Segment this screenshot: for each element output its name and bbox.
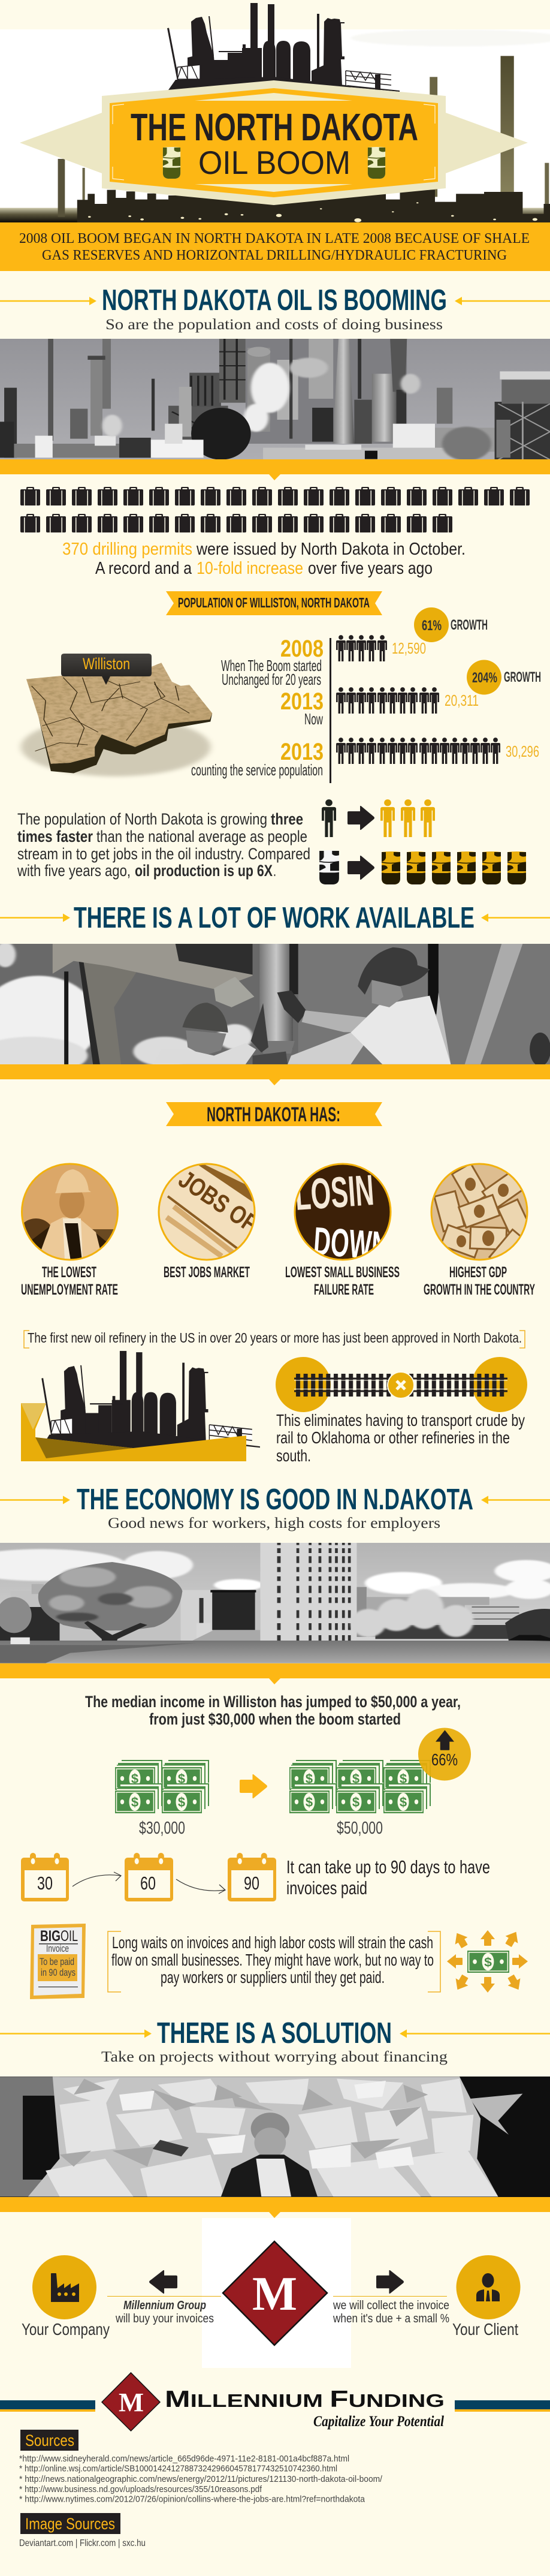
source links: * http://online.wsj.com/article/SB10001424127887324296604578177432510742360.html [19, 2463, 337, 2474]
panel: your client [452, 2255, 520, 2339]
source links: * http://news.nationalgeographic.com/news/energy/2012/11/pictures/121130-north-dakota-oil-boom/ [19, 2474, 383, 2484]
text block: population growth paragraph [17, 810, 310, 880]
subheading: So are the population and costs of doing business [105, 317, 443, 333]
badge: 61% growth: GROWTH [451, 617, 488, 633]
badge: 66% increase: 66% [431, 1750, 458, 1769]
icon: left barrel [163, 147, 180, 179]
row: 2013 with service population [191, 738, 539, 779]
band with pointer [0, 1064, 550, 1085]
photo: woman buried under paperwork [0, 2077, 550, 2197]
photo: oil workers [0, 942, 550, 1075]
source links [19, 2454, 383, 2504]
text block: eliminates rail transport [276, 1411, 525, 1465]
chart: income 30,000: $30,000 [139, 1819, 185, 1838]
band with pointer [0, 459, 550, 480]
flow: Millennium Group buys invoices: will buy your invoices [115, 2312, 214, 2325]
row: 2013 now [280, 687, 479, 728]
icon: big oil invoice: Invoice [46, 1943, 69, 1954]
row: 2013 now: 20,311 [445, 691, 479, 709]
image: worker in hard hat [18, 1163, 120, 1261]
icon: big oil invoice [30, 1924, 86, 1999]
image: closing down sign [293, 1163, 392, 1268]
text block: 90 days [286, 1856, 490, 1898]
chart: income 30,000 [115, 1760, 209, 1838]
icon: arrow to higher income [240, 1774, 267, 1798]
chart: population pictogram [191, 607, 541, 783]
text block: population growth paragraph: three [271, 810, 303, 828]
flow: Millennium Group buys invoices: Millennium Group [123, 2299, 206, 2312]
panel: hero header [0, 3, 550, 222]
label: UNEMPLOYMENT RATE [21, 1281, 118, 1298]
chart: income 50,000: $50,000 [337, 1819, 383, 1838]
panel: lowest small business failure rate [285, 1163, 400, 1298]
row: 2013 now: 2013 [280, 688, 324, 715]
label: Your Client [452, 2320, 518, 2339]
text: drilling permits: A record and a [95, 559, 192, 578]
image: closing down sign: DOWN [312, 1219, 390, 1268]
text: drilling permits: 10-fold increase [197, 559, 303, 578]
icon: big oil invoice: in 90 days [41, 1967, 75, 1978]
badge: 61% growth [414, 607, 488, 642]
banner: population of Williston [166, 591, 382, 615]
map: Williston region [21, 654, 212, 777]
row: 2008: 2008 [280, 636, 324, 662]
row: 2008: When The Boom started [221, 657, 322, 675]
logo: Millennium Funding [0, 2373, 550, 2431]
icon: right barrel [368, 147, 385, 179]
panel: image sources [19, 2513, 146, 2548]
banner: population of Williston: POPULATION OF WILLISTON, NORTH DAKOTA [178, 595, 370, 610]
heading: North Dakota oil is booming [0, 284, 550, 333]
heading: there is a solution: THERE IS A SOLUTION [157, 2017, 392, 2050]
subheading: Take on projects without worrying about financing [101, 2049, 448, 2065]
band with pointer [0, 1663, 550, 1684]
icon: factory [32, 2255, 96, 2319]
illustration: refinery on yellow ground [21, 1351, 260, 1461]
hero photo: refinery skyline [0, 29, 550, 222]
icon: one barrel becomes six [319, 850, 526, 884]
text: drilling permits: were issued by North Dakota in October. [196, 540, 466, 559]
text block: population growth paragraph: stream in to get jobs in the oil industry. Compared [17, 845, 310, 863]
flow: Millennium Group buys invoices [107, 2270, 221, 2325]
text block: population growth paragraph: oil production is up 6X [135, 862, 273, 880]
panel: sources [19, 2430, 383, 2504]
subheading: Good news for workers, high costs for employers [108, 1515, 440, 1531]
chart: income 50,000 [289, 1760, 431, 1838]
flow: collect the invoice: when it's due + a small % [333, 2312, 449, 2325]
banner: North Dakota has: NORTH DAKOTA HAS: [207, 1103, 340, 1126]
icon: person [457, 2255, 520, 2319]
text: drilling permits: 370 drilling permits [62, 540, 192, 559]
silhouette: refinery on top of badge [162, 3, 400, 102]
row: 2013 now: Now [304, 710, 323, 728]
text block: population growth paragraph: . [273, 862, 276, 880]
row: 2008: Unchanged for 20 years [222, 670, 321, 688]
icon: railway crossed out [276, 1357, 527, 1412]
label: LOWEST SMALL BUSINESS [285, 1264, 400, 1281]
badge: 204% growth: 204% [472, 670, 497, 686]
banner: North Dakota has [166, 1102, 382, 1126]
panel: image sources: Image Sources [25, 2515, 115, 2533]
label: THE LOWEST [42, 1264, 96, 1281]
icon: calendar 30: 30 [37, 1873, 53, 1894]
badge: title hexagon [20, 80, 528, 205]
callout: Williston: Williston [83, 655, 130, 673]
text block: population growth paragraph: with five years ago, [17, 862, 131, 880]
text block: population growth paragraph: times faster [17, 827, 93, 845]
photo: refinery with steam [0, 339, 550, 461]
image: newspaper jobs offered [158, 1163, 255, 1260]
badge: 61% growth: 61% [422, 618, 442, 634]
panel: intro band [0, 222, 550, 271]
callout: cash flow strain: pay workers or suppliers until they get paid. [161, 1968, 385, 1987]
timeline: 30 60 90 day calendars [21, 1853, 276, 1901]
label: Your Company [22, 2320, 110, 2339]
logo: Millennium Funding: M [119, 2388, 144, 2417]
tagline: Capitalize Your Potential [313, 2414, 444, 2430]
label: BEST JOBS MARKET [164, 1264, 250, 1281]
text block: 90 days: It can take up to 90 days to have [286, 1856, 490, 1877]
panel: your company [22, 2255, 110, 2339]
badge: 204% growth [467, 660, 541, 694]
text block: population growth paragraph: than the national average as people [96, 827, 307, 845]
image: newspaper jobs offered: JOBS OFFE [173, 1166, 283, 1253]
icon: calendar 60 [125, 1853, 173, 1901]
label [21, 1264, 118, 1298]
text block: median income: from just $30,000 when the boom started [149, 1710, 401, 1728]
image: scattered dollar bills [430, 1163, 528, 1260]
badge: 66% increase [418, 1728, 471, 1781]
panel: best jobs market [158, 1163, 255, 1277]
heading: there is a solution [0, 2017, 550, 2065]
heading: the economy is good [0, 1483, 550, 1531]
intro line 1: 2008 OIL BOOM BEGAN IN NORTH DAKOTA IN LATE 2008 BECAUSE OF SHALE [19, 231, 530, 246]
logo: Millennium diamond [223, 2241, 327, 2345]
label [285, 1264, 400, 1298]
callout: cash flow strain [108, 1931, 440, 1992]
arrow [176, 1879, 225, 1894]
icon: cash flowing outward [447, 1928, 528, 1993]
photo: state capitol building [0, 1542, 550, 1663]
icon: one person becomes three [322, 799, 435, 837]
intro line 2: GAS RESERVES AND HORIZONTAL DRILLING/HYDRAULIC FRACTURING [42, 248, 507, 263]
flow: collect the invoice: we will collect the invoice [333, 2299, 449, 2312]
text block: median income [85, 1693, 461, 1728]
label [424, 1264, 535, 1298]
source links: * http://www.nytimes.com/2012/07/26/opinion/collins-where-the-jobs-are.html?ref=northdakota [19, 2494, 365, 2504]
subtitle text: OIL BOOM [198, 144, 350, 181]
text: drilling permits [62, 540, 466, 578]
logo: Millennium diamond: M [252, 2268, 297, 2321]
text block: 90 days: invoices paid [286, 1877, 367, 1898]
label: HIGHEST GDP [449, 1264, 507, 1281]
icon: calendar 90 [228, 1853, 276, 1901]
icon: big oil invoice: To be paid [40, 1956, 74, 1967]
panel: lowest unemployment rate [18, 1163, 120, 1298]
band with pointer [0, 2197, 550, 2218]
chart: drilling permits icons [20, 487, 530, 532]
text: drilling permits: over five years ago [308, 559, 433, 578]
row: 2013 with service population: 2013 [280, 739, 324, 765]
panel: sources: Sources [25, 2431, 74, 2449]
row: 2008: 12,590 [392, 639, 426, 657]
text block: population growth paragraph: The population of North Dakota is growing [17, 810, 267, 828]
title text: THE NORTH DAKOTA [131, 106, 418, 149]
icon: big oil invoice: OIL [61, 1928, 78, 1945]
row: 2013 with service population: counting the service population [191, 761, 323, 779]
callout: Williston [61, 654, 152, 685]
image: closing down sign: LOSIN [293, 1165, 376, 1220]
label: FAILURE RATE [314, 1281, 374, 1298]
icon: calendar 60: 60 [140, 1873, 156, 1894]
text block: median income: The median income in Williston has jumped to $50,000 a year, [85, 1693, 461, 1711]
text block: eliminates rail transport: south. [276, 1446, 311, 1465]
flow: collect the invoice [333, 2270, 449, 2325]
logo panel: white backing [202, 2218, 351, 2368]
wordmark: M ILLENNIUM FUNDING [165, 2387, 445, 2412]
arrow [72, 1872, 121, 1886]
row: 2008 [221, 635, 426, 688]
panel: highest GDP growth [424, 1163, 535, 1298]
icon: calendar 30 [21, 1853, 69, 1901]
icon: calendar 90: 90 [244, 1873, 259, 1894]
image source list: Deviantart.com | Flickr.com | sxc.hu [19, 2538, 146, 2548]
source links: *http://www.sidneyherald.com/news/article_665d96de-4971-11e2-8181-001a4bcf887a.html [19, 2454, 349, 2464]
icon: big oil invoice: BIG [40, 1928, 61, 1945]
source links: * http://www.business.nd.gov/uploads/resources/355/10reasons.pdf [19, 2484, 262, 2494]
